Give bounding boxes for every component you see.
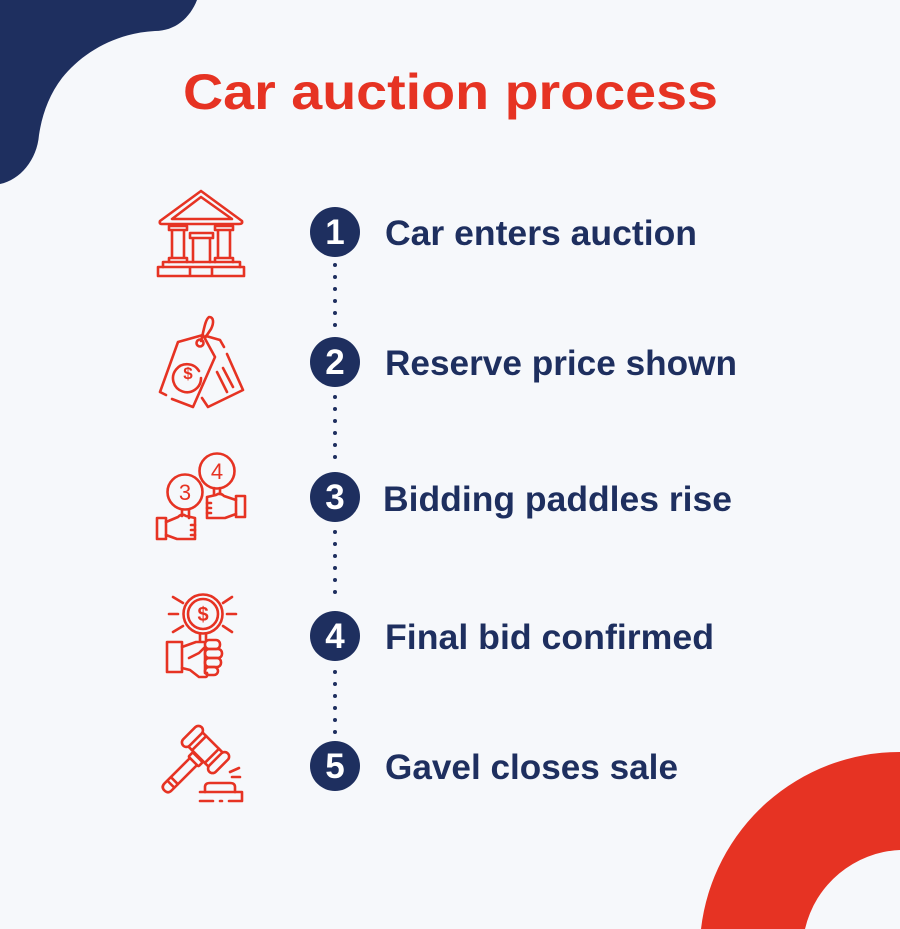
number badge 1: 1 xyxy=(325,213,345,252)
number badge 4 xyxy=(310,611,360,661)
number badge 2: 2 xyxy=(325,343,345,382)
decorative navy blob, top-left xyxy=(0,0,197,184)
number badge 2 xyxy=(310,337,360,387)
icon: price tags: $ xyxy=(183,364,193,383)
step 1 xyxy=(158,191,697,276)
label 5: Gavel closes sale xyxy=(385,748,678,787)
icon: bidding paddles: 3 xyxy=(179,480,191,505)
icon: magnifier over dollar xyxy=(167,594,236,677)
label 3: Bidding paddles rise xyxy=(383,480,732,519)
step 2 xyxy=(160,317,737,407)
number badge 1 xyxy=(310,207,360,257)
icon: magnifier over dollar: $ xyxy=(197,604,209,626)
number badge 3: 3 xyxy=(325,478,345,517)
decorative red ring, bottom-right xyxy=(701,752,900,929)
icon: price tags xyxy=(160,317,243,407)
step 4 xyxy=(167,594,714,677)
dotted connector line xyxy=(333,263,337,734)
number badge 4: 4 xyxy=(325,617,345,656)
step 5 xyxy=(148,724,678,807)
label 2: Reserve price shown xyxy=(385,344,737,383)
icon: gavel xyxy=(148,724,242,807)
label 1: Car enters auction xyxy=(385,214,697,253)
number badge 5: 5 xyxy=(325,747,345,786)
icon: auction house xyxy=(158,191,244,276)
icon: bidding paddles xyxy=(157,454,245,539)
number badge 5 xyxy=(310,741,360,791)
title: Car auction process xyxy=(183,64,718,120)
step 3 xyxy=(157,454,732,539)
number badge 3 xyxy=(310,472,360,522)
icon: bidding paddles: 4 xyxy=(211,459,223,484)
label 4: Final bid confirmed xyxy=(385,618,714,657)
